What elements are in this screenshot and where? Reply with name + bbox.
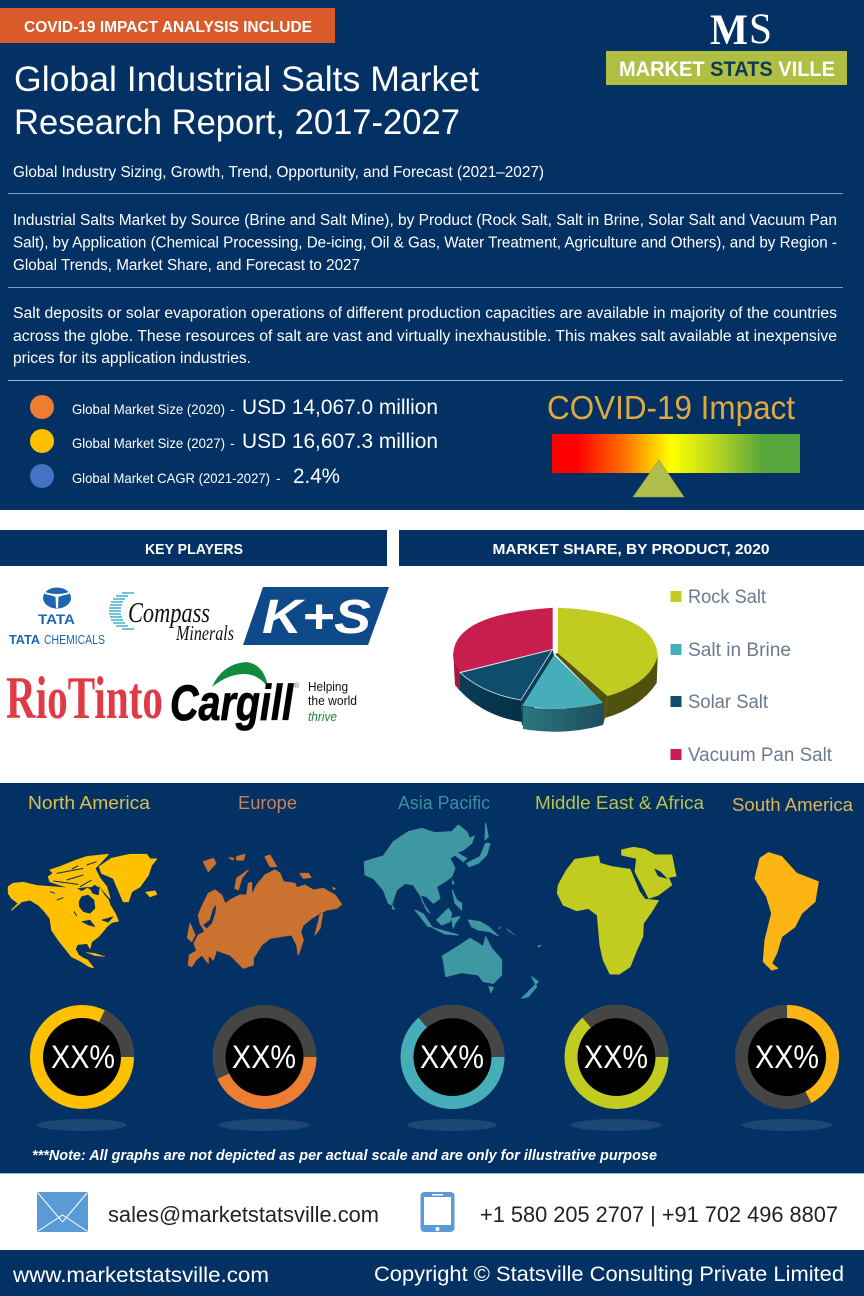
- slice: rock salt: [555, 608, 658, 725]
- logo: cargill: Cargill: [170, 675, 294, 731]
- donut: middle east and africa: XX%: [584, 1039, 648, 1075]
- stat: cagr: 2.4%: [293, 465, 340, 488]
- text block: segmentation: Industrial Salts Market by Source (Brine and Salt Mine), by Product (Rock Salt, Salt in Brine, Solar Salt and Vacuum Pan: [13, 212, 837, 229]
- note: ***Note: All graphs are not depicted as per actual scale and are only for illustrative purpose: [32, 1147, 657, 1164]
- logo: cargill: ®: [294, 682, 300, 690]
- contact: email address: sales@marketstatsville.com: [108, 1202, 379, 1227]
- logo: tata chemicals: [9, 588, 105, 647]
- stat: market size 2020: -: [230, 401, 235, 417]
- text block: description: prices for its application industries.: [13, 350, 251, 367]
- text block: description: [13, 305, 837, 367]
- text block: segmentation: Global Trends, Market Share, and Forecast to 2027: [13, 257, 360, 274]
- stat: market size 2020: USD 14,067.0 million: [242, 396, 438, 419]
- title: [14, 60, 479, 142]
- text block: description: Salt deposits or solar evaporation operations of different production capacities are available in majority of the countries: [13, 305, 837, 322]
- panel: header: [0, 0, 864, 510]
- stat: market size 2020: Global Market Size (2020): [72, 401, 225, 417]
- logo: rio tinto: RioTinto: [6, 665, 163, 731]
- pie chart: market share by product: [453, 608, 658, 732]
- stat: cagr: Global Market CAGR (2021-2027): [72, 470, 270, 486]
- covid-19 impact gauge: COVID-19 Impact: [547, 389, 795, 426]
- heading: key players: [0, 530, 387, 566]
- logo: market stats ville: M: [710, 7, 748, 54]
- logo: k+s: K+S: [262, 591, 371, 644]
- panel: footer: www.marketstatsville.com: [12, 1264, 269, 1287]
- label: middle east and africa: Middle East & Africa: [535, 793, 705, 813]
- icon: email: [37, 1192, 88, 1232]
- stat: market size 2027: -: [230, 435, 235, 451]
- legend: products: Rock Salt: [688, 587, 767, 608]
- stat: market size 2020: [30, 395, 438, 419]
- stat: cagr: -: [276, 470, 281, 486]
- donut: south america: [742, 1011, 833, 1131]
- map: europe and russia: [187, 854, 342, 968]
- covid-19 impact gauge: [547, 389, 800, 497]
- logo: market stats ville: [606, 6, 847, 85]
- label: north america: North America: [28, 793, 151, 813]
- text block: segmentation: Salt), by Application (Chemical Processing, De-icing, Oil & Gas, Water Treatment, Agriculture and Others), and by Region -: [13, 234, 837, 252]
- panel: footer: [0, 1250, 864, 1296]
- logo: cargill: [170, 662, 357, 731]
- heading: key players: KEY PLAYERS: [145, 541, 243, 558]
- donut: europe: [219, 1012, 310, 1131]
- logo: compass minerals: Compass: [128, 597, 210, 629]
- badge: covid-19 analysis: [0, 8, 335, 43]
- logo: tata chemicals: TATA: [38, 611, 75, 627]
- logo: k+s: [243, 587, 389, 645]
- heading: market share: MARKET SHARE, BY PRODUCT, 2020: [492, 541, 770, 558]
- legend: products: Salt in Brine: [688, 640, 791, 661]
- donut: europe: XX%: [232, 1039, 296, 1075]
- title: Global Industrial Salts Market: [14, 60, 479, 99]
- slice: vacuum pan salt: [453, 608, 553, 691]
- text block: description: across the globe. These resources of salt are vast and virtually inexhaustible. This makes salt available at inexpensive: [13, 328, 837, 345]
- logo: tata chemicals: CHEMICALS: [44, 633, 105, 647]
- title: Research Report, 2017-2027: [14, 103, 460, 142]
- logo: compass minerals: [109, 593, 234, 645]
- label: asia pacific: Asia Pacific: [398, 793, 490, 813]
- logo: market stats ville: S: [749, 6, 772, 53]
- logo: tata chemicals: TATA: [9, 633, 40, 647]
- legend: products: [670, 587, 833, 766]
- logo: cargill: Helping: [308, 680, 348, 694]
- text block: segmentation: [13, 212, 837, 274]
- badge: covid-19 analysis: COVID-19 IMPACT ANALYSIS INCLUDE: [24, 19, 312, 36]
- stat: market size 2027: USD 16,607.3 million: [242, 430, 438, 453]
- map: asia pacific: [364, 823, 541, 998]
- logo: cargill: the world: [308, 694, 357, 708]
- map: south america: [755, 853, 818, 970]
- map: middle east and africa: [557, 847, 676, 974]
- logo: compass minerals: Minerals: [175, 621, 234, 645]
- donut: south america: XX%: [755, 1039, 819, 1075]
- legend: products: Solar Salt: [688, 692, 769, 713]
- panel: footer: Copyright © Statsville Consulting Private Limited: [374, 1263, 844, 1286]
- slice: salt in brine: [522, 655, 603, 732]
- stat: cagr: [30, 464, 340, 488]
- donut: middle east and africa: [571, 1012, 662, 1131]
- heading: market share: [399, 530, 864, 566]
- logo: market stats ville: MARKET STATS VILLE: [619, 58, 835, 81]
- label: europe: Europe: [238, 793, 297, 813]
- stat: market size 2027: [30, 429, 438, 453]
- donut: asia pacific: XX%: [420, 1039, 484, 1075]
- logo: cargill: thrive: [308, 710, 337, 724]
- contact: phone numbers: +1 580 205 2707 | +91 702 496 8807: [480, 1202, 838, 1227]
- stat: market size 2027: Global Market Size (2027): [72, 435, 225, 451]
- legend: products: Vacuum Pan Salt: [688, 745, 833, 766]
- panel: regions: [0, 783, 864, 1173]
- donut: north america: XX%: [51, 1039, 115, 1075]
- map: north america: [8, 854, 157, 968]
- label: south america: South America: [732, 795, 854, 815]
- donut: north america: [36, 1012, 128, 1131]
- subtitle: Global Industry Sizing, Growth, Trend, Opportunity, and Forecast (2021–2027): [13, 164, 544, 181]
- donut: asia pacific: [407, 1012, 498, 1131]
- icon: phone: [420, 1192, 454, 1232]
- slice: solar salt: [460, 650, 555, 729]
